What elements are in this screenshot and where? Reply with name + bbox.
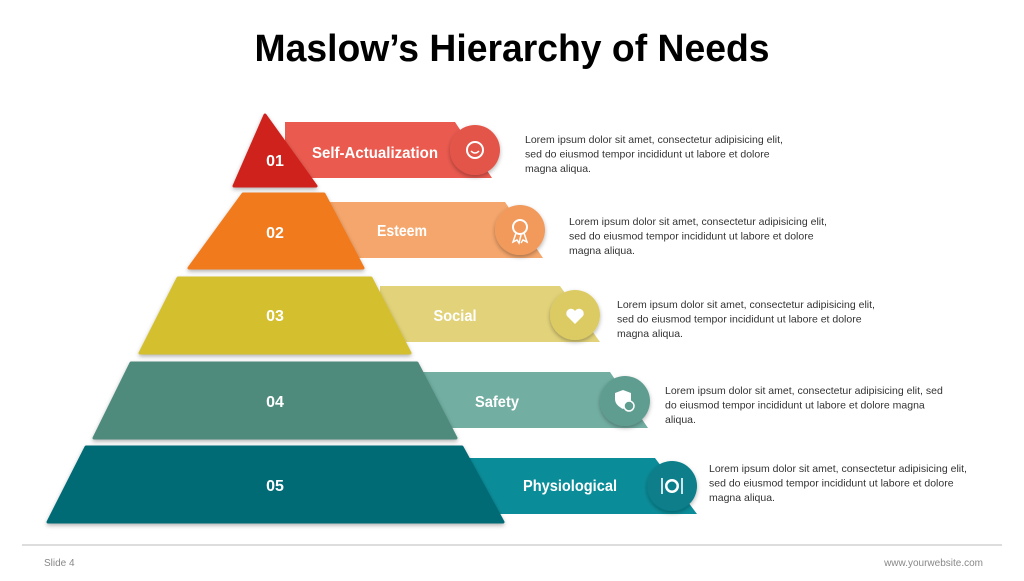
- level 3: social: [140, 278, 600, 353]
- description texts: sed do eiusmod tempor incididunt ut labore et dolore: [617, 314, 862, 326]
- level 2: esteem: Esteem: [377, 223, 427, 240]
- description texts: sed do eiusmod tempor incididunt ut labore et dolore: [525, 148, 770, 160]
- icon: ribbon award: [495, 205, 545, 255]
- icon: heart: [550, 290, 600, 340]
- footer: www.yourwebsite.com: [883, 558, 983, 569]
- level 4: safety: Safety: [475, 394, 519, 411]
- description texts: Lorem ipsum dolor sit amet, consectetur adipisicing elit,: [709, 463, 967, 475]
- description texts: Lorem ipsum dolor sit amet, consectetur adipisicing elit,: [617, 299, 875, 311]
- level 2: esteem: [189, 194, 545, 268]
- description texts: magna aliqua.: [569, 245, 635, 257]
- level 3: social: Social: [434, 308, 476, 325]
- level 4: safety: 04: [266, 394, 284, 411]
- description texts: aliqua.: [665, 414, 696, 426]
- level 5: physiological: 05: [266, 478, 284, 495]
- level 1: self-actualization: Self-Actualization: [312, 145, 438, 162]
- icon: shield: [600, 376, 650, 426]
- level 5: physiological: [48, 447, 697, 522]
- description texts: magna aliqua.: [709, 492, 775, 504]
- description texts: Lorem ipsum dolor sit amet, consectetur adipisicing elit,: [525, 134, 783, 146]
- title: Maslow’s Hierarchy of Needs: [254, 28, 770, 70]
- level 2: esteem: 02: [266, 225, 284, 242]
- icon: plate: [647, 461, 697, 511]
- description texts: [525, 134, 967, 504]
- level 1: self-actualization: 01: [266, 153, 284, 170]
- description texts: magna aliqua.: [525, 163, 591, 175]
- footer: [44, 558, 983, 569]
- description texts: Lorem ipsum dolor sit amet, consectetur adipisicing elit,: [569, 216, 827, 228]
- description texts: do eiusmod tempor incididunt ut labore et dolore magna: [665, 400, 925, 412]
- description texts: sed do eiusmod tempor incididunt ut labore et dolore: [709, 478, 954, 490]
- level 3: social: 03: [266, 308, 284, 325]
- footer: Slide 4: [44, 558, 75, 569]
- level 5: physiological: Physiological: [523, 478, 617, 495]
- description texts: Lorem ipsum dolor sit amet, consectetur adipisicing elit, sed: [665, 385, 943, 397]
- level 1: self-actualization: [234, 115, 500, 186]
- level 4: safety: [94, 363, 650, 438]
- icon: smiley: [450, 125, 500, 175]
- description texts: magna aliqua.: [617, 328, 683, 340]
- description texts: sed do eiusmod tempor incididunt ut labore et dolore: [569, 230, 814, 242]
